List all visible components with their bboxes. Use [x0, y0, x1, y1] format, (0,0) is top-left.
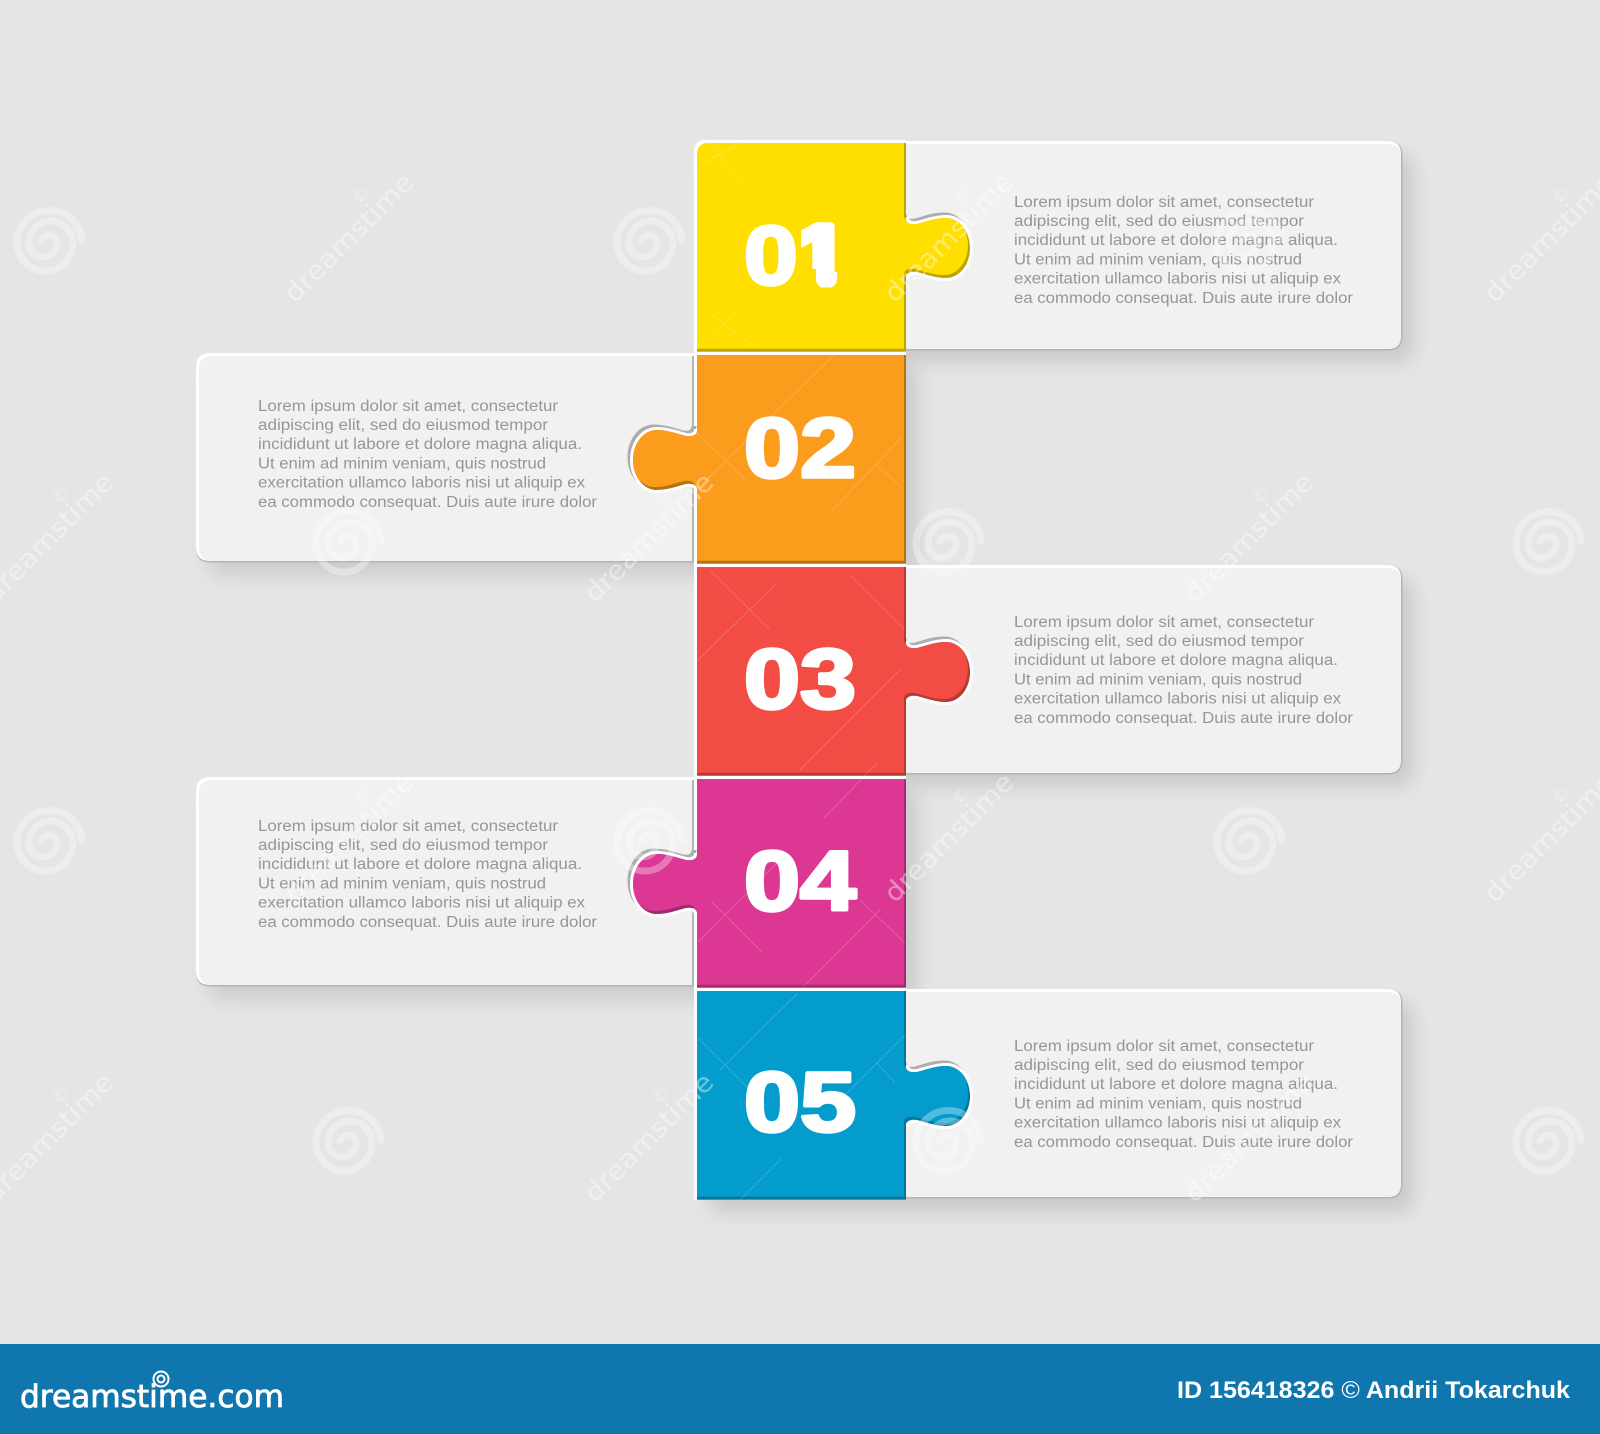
body text: step 01: ea commodo consequat. Duis aute irure dolor: [1014, 290, 1353, 307]
watermark wordmarks: dreamstime: [1178, 467, 1320, 609]
body text: step 02: ea commodo consequat. Duis aute irure dolor: [258, 494, 597, 511]
body text: step 05: Ut enim ad minim veniam, quis nostrud: [1014, 1095, 1302, 1112]
body text: step 01: exercitation ullamco laboris nisi ut aliquip ex: [1014, 271, 1341, 288]
watermark wordmarks: dreamstime: [878, 167, 1020, 309]
panel: step 03 text card: [900, 565, 1402, 774]
number 01: 1: [793, 208, 849, 302]
watermark wordmarks: dreamstime: [578, 1067, 720, 1209]
body text: step 02: adipiscing elit, sed do eiusmod tempor: [258, 417, 548, 434]
watermark wordmarks: dreamstime: [278, 167, 420, 309]
image credit: ID 156418326 © Andrii Tokarchuk: [1177, 1377, 1570, 1404]
number 04: 04: [744, 834, 857, 928]
number 01: [746, 222, 837, 288]
body text: step 01: adipiscing elit, sed do eiusmod tempor: [1014, 213, 1304, 230]
watermark wordmarks: dreamstime: [878, 767, 1020, 909]
number 02: 02: [744, 401, 856, 495]
watermark spirals: [17, 210, 1581, 1171]
body text: step 03: incididunt ut labore et dolore magna aliqua.: [1014, 652, 1338, 669]
body text: step 03: [1014, 614, 1353, 727]
watermark copyright marks: ©: [348, 783, 375, 810]
puzzle piece 02: orange: [630, 352, 906, 564]
number 05: 05: [744, 1055, 856, 1149]
body text: step 04: ea commodo consequat. Duis aute irure dolor: [258, 914, 597, 931]
watermark wordmarks: [0, 167, 1600, 1209]
watermark copyright marks: ©: [348, 183, 375, 210]
body text: step 02: [258, 398, 597, 511]
watermark copyright marks: [48, 183, 1575, 1110]
puzzle piece 03: red: [695, 564, 970, 776]
number 01: 0: [744, 209, 798, 303]
body text: step 02: Ut enim ad minim veniam, quis nostrud: [258, 455, 546, 472]
body text: step 04: exercitation ullamco laboris nisi ut aliquip ex: [258, 895, 585, 912]
puzzle piece 04: magenta: [630, 776, 906, 988]
watermark copyright marks: ©: [1248, 1083, 1275, 1110]
watermark wordmarks: dreamstime: [578, 467, 720, 609]
watermark copyright marks: ©: [648, 1083, 675, 1110]
footer logo wordmark: dreamstime.com: [20, 1379, 284, 1415]
body text: step 05: [1014, 1038, 1353, 1151]
watermark wordmarks: dreamstime: [1178, 1067, 1320, 1209]
body text: step 01: [1014, 194, 1353, 307]
number 03: 03: [744, 632, 856, 726]
watermark thin cross lines: [694, 143, 905, 1200]
panel: step 02 text card: [196, 353, 700, 562]
watermark copyright marks: ©: [1548, 183, 1575, 210]
footer bar: [0, 1344, 1600, 1434]
watermark copyright marks: ©: [1548, 783, 1575, 810]
body text: step 03: ea commodo consequat. Duis aute irure dolor: [1014, 710, 1353, 727]
body text: step 02: exercitation ullamco laboris nisi ut aliquip ex: [258, 475, 585, 492]
watermark copyright marks: ©: [648, 483, 675, 510]
body text: step 01: Lorem ipsum dolor sit amet, consectetur: [1014, 194, 1314, 211]
body text: step 05: exercitation ullamco laboris nisi ut aliquip ex: [1014, 1115, 1341, 1132]
body text: step 03: exercitation ullamco laboris nisi ut aliquip ex: [1014, 691, 1341, 708]
body text: step 04: [258, 818, 597, 931]
puzzle piece 01: yellow: [695, 140, 970, 352]
body text: step 03: Ut enim ad minim veniam, quis nostrud: [1014, 671, 1302, 688]
footer logo swirl: [154, 1372, 168, 1386]
body text: step 05: incididunt ut labore et dolore magna aliqua.: [1014, 1076, 1338, 1093]
body text: step 04: Lorem ipsum dolor sit amet, consectetur: [258, 818, 558, 835]
body text: step 04: adipiscing elit, sed do eiusmod tempor: [258, 837, 548, 854]
panel: step 04 text card: [196, 777, 700, 986]
body text: step 01: Ut enim ad minim veniam, quis nostrud: [1014, 251, 1302, 268]
watermark copyright marks: ©: [948, 183, 975, 210]
watermark copyright marks: ©: [948, 783, 975, 810]
body text: step 04: Ut enim ad minim veniam, quis nostrud: [258, 875, 546, 892]
watermark copyright marks: ©: [1248, 483, 1275, 510]
panel: step 01 text card: [900, 141, 1402, 350]
body text: step 03: Lorem ipsum dolor sit amet, consectetur: [1014, 614, 1314, 631]
body text: step 05: adipiscing elit, sed do eiusmod tempor: [1014, 1057, 1304, 1074]
puzzle piece 05: blue: [695, 988, 970, 1200]
panel: step 05 text card: [900, 989, 1402, 1198]
body text: step 04: incididunt ut labore et dolore magna aliqua.: [258, 856, 582, 873]
body text: step 01: incididunt ut labore et dolore magna aliqua.: [1014, 232, 1338, 249]
watermark wordmarks: dreamstime: [278, 767, 420, 909]
body text: step 02: Lorem ipsum dolor sit amet, consectetur: [258, 398, 558, 415]
watermark copyright marks: ©: [48, 1083, 75, 1110]
body text: step 05: ea commodo consequat. Duis aute irure dolor: [1014, 1134, 1353, 1151]
body text: step 02: incididunt ut labore et dolore magna aliqua.: [258, 436, 582, 453]
white column behind tiles: [694, 140, 906, 1200]
body text: step 03: adipiscing elit, sed do eiusmod tempor: [1014, 633, 1304, 650]
body text: step 05: Lorem ipsum dolor sit amet, consectetur: [1014, 1038, 1314, 1055]
watermark copyright marks: ©: [48, 483, 75, 510]
soft drop shadows: [208, 154, 1414, 1213]
